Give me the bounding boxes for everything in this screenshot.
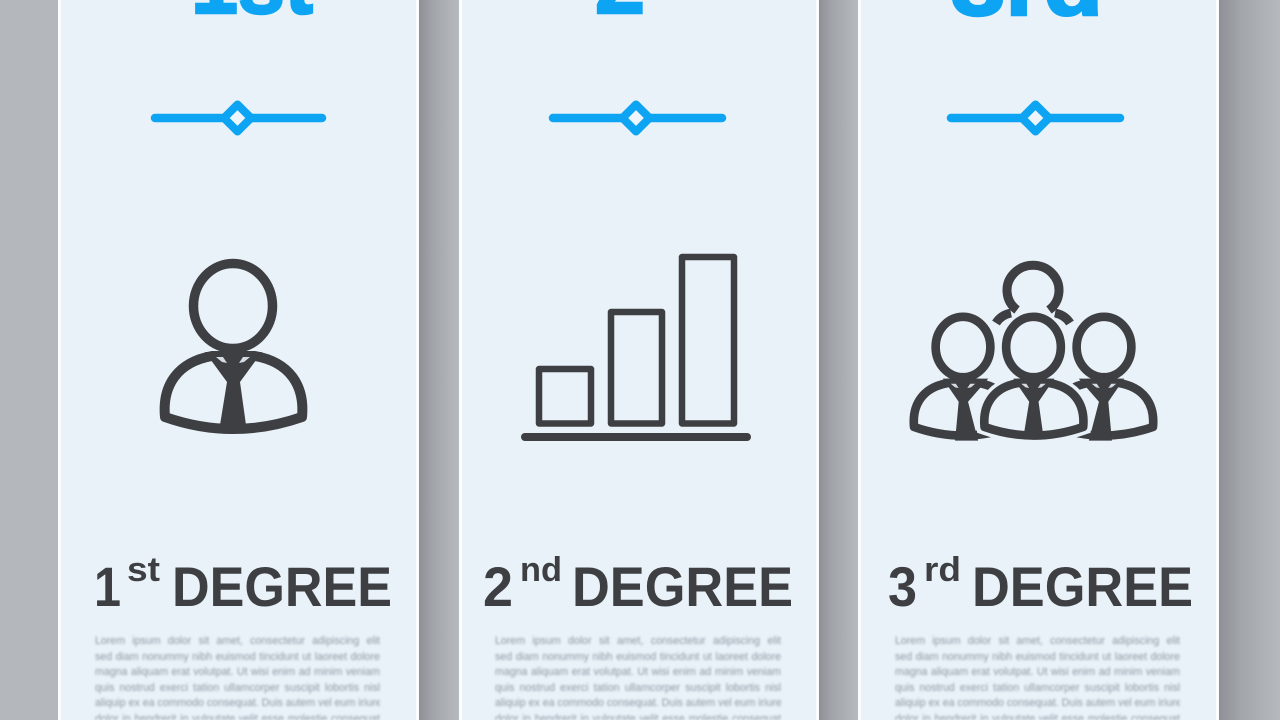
panel: 2nd degree (459, 0, 819, 720)
text block: body copy 1: aliquip ex ea commodo consequat. Duis autem vel eum iriure (95, 697, 380, 709)
title: 1st degree: st (127, 551, 160, 589)
text block: body copy 3: Lorem ipsum dolor sit amet, consectetur adipiscing elit (895, 635, 1180, 647)
title: 2nd degree: nd (520, 551, 562, 589)
text block: body copy 1: sed diam nonummy nibh euismod tincidunt ut laoreet dolore (95, 651, 380, 663)
text block: body copy 2: aliquip ex ea commodo consequat. Duis autem vel eum iriure (495, 697, 781, 709)
title: 2nd degree: 2 (483, 555, 513, 618)
text block: body copy 2: quis nostrud exerci tation ullamcorper suscipit lobortis nisl (495, 682, 781, 694)
text block: body copy 1 (94, 635, 381, 720)
text block: body copy 2: Lorem ipsum dolor sit amet, consectetur adipiscing elit (495, 635, 781, 647)
text block: body copy 3: aliquip ex ea commodo consequat. Duis autem vel eum iriure (895, 697, 1180, 709)
icon: line and diamond divider (155, 104, 322, 132)
icon: team of people (914, 265, 1153, 441)
back person (996, 265, 1070, 323)
icon: bar chart (525, 257, 747, 437)
text block: body copy 3: sed diam nonummy nibh euismod tincidunt ut laoreet dolore (895, 651, 1180, 663)
text block: body copy 1: magna aliquam erat volutpat. Ut wisi enim ad minim veniam (95, 666, 380, 678)
text block: body copy 3: magna aliquam erat volutpat. Ut wisi enim ad minim veniam (895, 666, 1180, 678)
text block: body copy 2: sed diam nonummy nibh euismod tincidunt ut laoreet dolore (495, 651, 781, 663)
text block: body copy 2: magna aliquam erat volutpat. Ut wisi enim ad minim veniam (495, 666, 781, 678)
text block: body copy 3: quis nostrud exerci tation ullamcorper suscipit lobortis nisl (895, 682, 1180, 694)
right person (1054, 317, 1153, 441)
panel: 3rd degree (858, 0, 1219, 720)
title: 2nd degree: DEGREE (572, 555, 793, 618)
text block: body copy 3 (894, 635, 1181, 720)
front person (984, 317, 1083, 439)
text block: body copy 1: Lorem ipsum dolor sit amet, consectetur adipiscing elit (95, 635, 380, 647)
title: 1st degree (94, 551, 392, 618)
left person (914, 317, 1013, 441)
title: 1st degree: 1 (94, 555, 121, 618)
text block: body copy 2 (494, 635, 782, 720)
icon: line and diamond divider (553, 104, 722, 132)
title: 3rd degree: rd (924, 551, 961, 589)
title: 3rd degree: 3 (888, 555, 917, 618)
panel: 1st degree (58, 0, 419, 720)
text block: body copy 1: quis nostrud exerci tation ullamcorper suscipit lobortis nisl (95, 682, 380, 694)
title: 1st degree: DEGREE (172, 555, 392, 618)
title: 3rd degree (888, 551, 1193, 618)
title: 3rd degree: DEGREE (972, 555, 1193, 618)
icon: person with tie (165, 264, 302, 434)
icon: line and diamond divider (951, 104, 1120, 132)
title: 2nd degree (483, 551, 793, 618)
